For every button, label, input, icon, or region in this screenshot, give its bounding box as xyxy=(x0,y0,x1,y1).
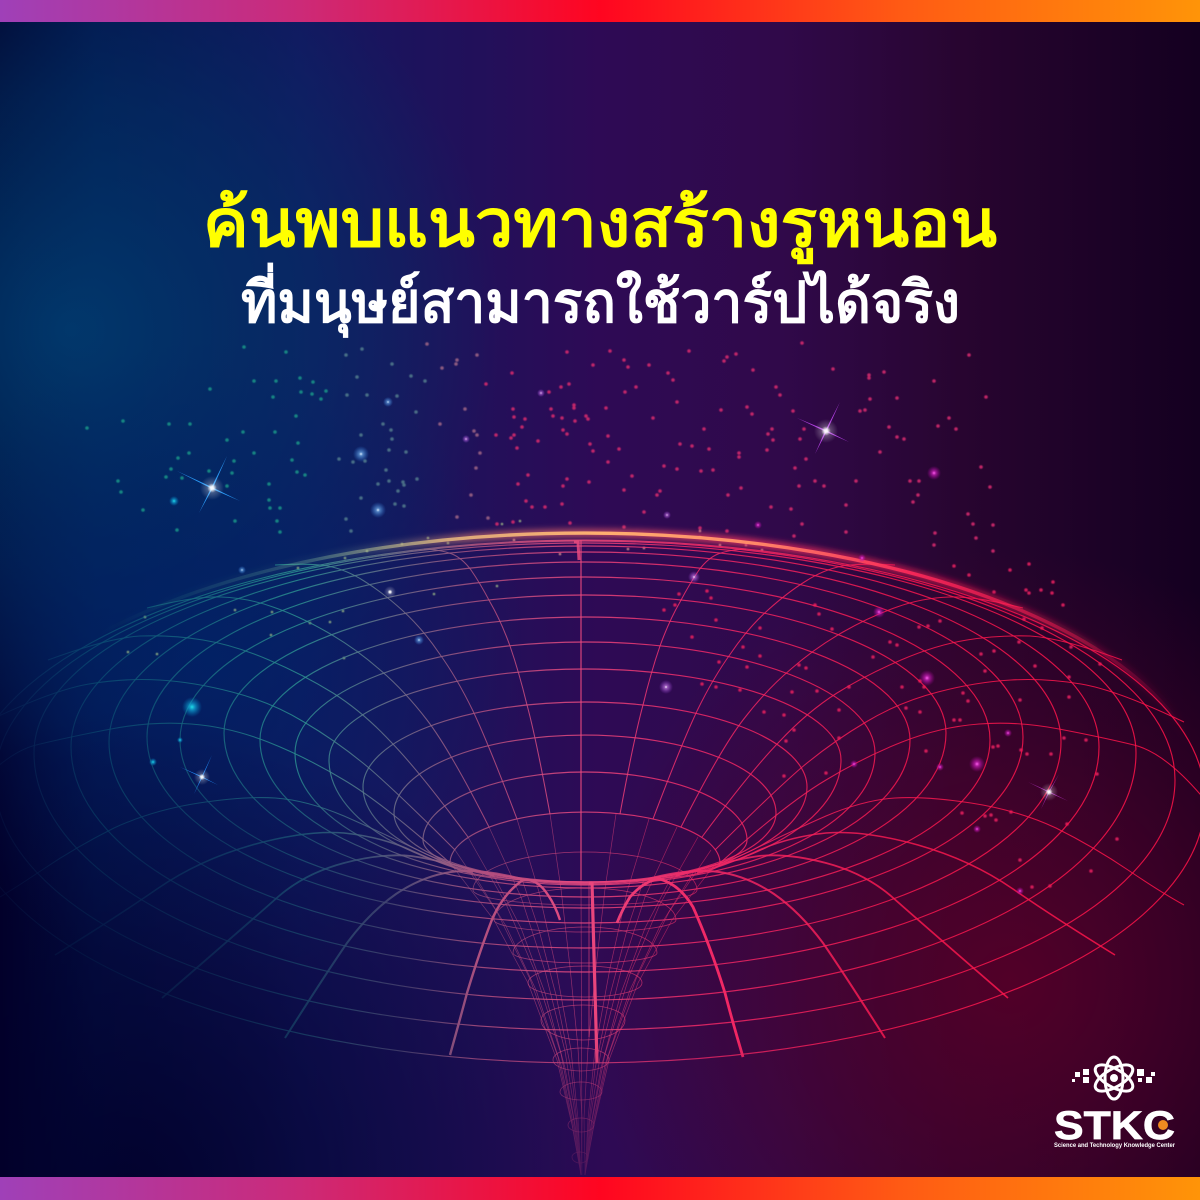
top gradient bar xyxy=(0,0,1200,22)
logo orange dot xyxy=(1158,1120,1168,1130)
STKC logo xyxy=(1054,1057,1175,1149)
star field particles xyxy=(87,343,1117,887)
logo pixel squares xyxy=(1072,1069,1155,1083)
glowing rim of the wormhole xyxy=(0,533,1200,800)
title line 1: ค้นพบแนวทางสร้างรูหนอน xyxy=(203,186,997,265)
title line 2: ที่มนุษย์สามารถใช้วาร์ปได้จริง xyxy=(241,262,960,339)
sparkle star: magenta, lower right xyxy=(1028,774,1068,809)
glow points xyxy=(149,389,1024,895)
wormhole grid funnel xyxy=(0,500,1200,1200)
title xyxy=(203,186,997,339)
sparkle star: blue, upper left xyxy=(177,456,240,513)
logo wordmark: STKC xyxy=(1054,1104,1175,1148)
logo atom icon xyxy=(1091,1057,1137,1099)
bottom gradient bar xyxy=(0,1177,1200,1200)
sparkle star: violet, upper right xyxy=(797,402,849,454)
sparkle star: blue, lower left xyxy=(180,755,218,794)
logo tagline: Science and Technology Knowledge Center xyxy=(1054,1142,1175,1149)
